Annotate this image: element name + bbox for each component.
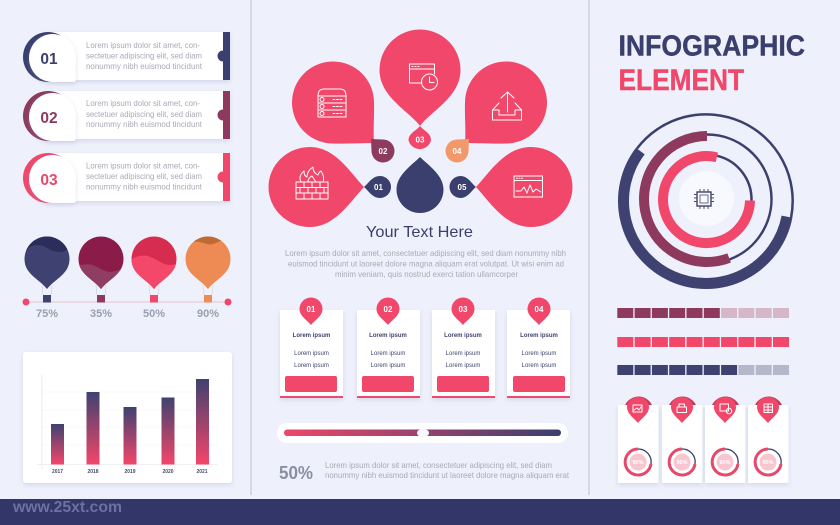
- balloon 50%: 50%: [143, 308, 165, 320]
- panel: bar chart: [23, 352, 232, 483]
- panel: numbered list: [23, 32, 230, 203]
- small card 1: [618, 397, 658, 483]
- petal tag 05: 05: [458, 183, 467, 192]
- bar 2020: 2020: [162, 469, 174, 475]
- small card 2: 90%: [676, 460, 688, 466]
- petal 01: [268, 147, 364, 227]
- balloon 75%: [24, 236, 70, 317]
- list item 01: sectetuer adipiscing elit, sed diam: [86, 50, 202, 60]
- footer band: www.25xt.com: [12, 499, 122, 516]
- icon: server rack: [318, 89, 346, 117]
- middle ring: [644, 134, 771, 262]
- balloon 35%: [77, 236, 125, 320]
- card 04: [507, 298, 570, 398]
- radial chart: [624, 114, 793, 283]
- petal tag 02: 02: [379, 147, 388, 156]
- list item 01: [23, 32, 230, 82]
- text block: center paragraph: [285, 248, 566, 279]
- stat: 50%: 50%: [279, 463, 313, 483]
- text block: stat description: nonummy nibh euismod tincidunt ut laoreet dolore magna aliquam erat: [325, 470, 570, 480]
- petal tag 02: [371, 139, 394, 162]
- card 03: Lorem ipsum: [444, 333, 482, 339]
- card 02: Lorem ipsum: [369, 333, 407, 339]
- bar 2019: 2019: [124, 469, 136, 475]
- small card 3: [705, 397, 746, 483]
- card 03: Lorem ipsum: [446, 363, 480, 369]
- footer band: [0, 499, 840, 525]
- petal tag 04: [446, 139, 469, 162]
- list item 01: Lorem ipsum dolor sit amet, con-: [86, 40, 200, 50]
- card 03: 03: [459, 305, 468, 314]
- central navy drop: [396, 157, 444, 213]
- icon: firewall: [296, 167, 328, 199]
- balloon 90%: 90%: [197, 308, 219, 320]
- card 02: [357, 298, 420, 398]
- list item 02: [23, 91, 230, 141]
- card 03: [432, 298, 495, 398]
- card 04: Lorem ipsum: [522, 363, 556, 369]
- list item 03: Lorem ipsum dolor sit amet, con-: [86, 160, 200, 170]
- outer ring: [624, 114, 793, 283]
- list item 02: sectetuer adipiscing elit, sed diam: [86, 109, 202, 119]
- progress bar: navy 7 of 10: [617, 365, 789, 375]
- card 01: Lorem ipsum: [293, 333, 330, 339]
- list item 01: nonummy nibh euismod tincidunt: [86, 61, 203, 71]
- petal tag 03: [408, 126, 431, 149]
- card 02: Lorem ipsum: [371, 363, 405, 369]
- icon: microchip: [679, 171, 734, 226]
- balloon 50%: [130, 236, 178, 320]
- petal tag 01: 01: [374, 183, 383, 192]
- progress bar: maroon 6 of 10: [617, 308, 789, 318]
- card 02: 02: [384, 305, 393, 314]
- bar 2017: 2017: [52, 469, 63, 475]
- progress bar: red 10 of 10: [617, 337, 789, 347]
- text block: stat description: Lorem ipsum dolor sit amet, consectetuer adipiscing elit, sed diam: [325, 460, 552, 470]
- icon: window with clock: [410, 64, 438, 90]
- petal tag 03: 03: [416, 136, 425, 144]
- small card 1: 90%: [632, 460, 644, 466]
- small card 3: 90%: [719, 460, 731, 466]
- text block: center paragraph: euismod tincidunt ut laoreet dolore magna aliquam erat volutpat. Ut wisi enim ad: [288, 258, 564, 268]
- panel: pricing cards: [280, 298, 570, 398]
- inner ring: [663, 156, 752, 243]
- petal tag 05: [450, 176, 476, 198]
- bar 2019: [124, 407, 136, 475]
- balloon 75%: 75%: [36, 308, 58, 320]
- balloon 90%: [186, 236, 230, 317]
- slider: [277, 423, 568, 443]
- card 01: Lorem ipsum: [294, 363, 329, 369]
- title: INFOGRAPHIC: [618, 30, 805, 62]
- small card 2: [662, 397, 702, 483]
- list item 02: nonummy nibh euismod tincidunt: [86, 119, 203, 129]
- bar 2020: [162, 398, 174, 475]
- list item 03: sectetuer adipiscing elit, sed diam: [86, 171, 202, 181]
- petal 05: [476, 147, 572, 227]
- bar 2018: 2018: [87, 469, 99, 475]
- card 01: 01: [307, 305, 316, 314]
- panel: balloon percentages: [22, 236, 232, 317]
- list item 03: 03: [40, 172, 58, 189]
- bar 2018: [86, 392, 100, 475]
- card 04: Lorem ipsum: [520, 333, 558, 339]
- small card 4: 90%: [762, 460, 774, 466]
- card 03: Lorem ipsum: [446, 351, 480, 357]
- list item 03: [23, 153, 230, 203]
- petal tag 04: 04: [453, 147, 462, 156]
- card 01: Lorem ipsum: [294, 351, 329, 357]
- text block: center paragraph: Lorem ipsum dolor sit amet, consectetuer adipiscing elit, sed diam nonummy nibh: [285, 248, 566, 258]
- petal tag 01: [364, 176, 391, 198]
- icon: upload tray: [492, 92, 522, 120]
- title: [618, 30, 805, 97]
- bar 2017: [51, 424, 64, 475]
- list item 02: Lorem ipsum dolor sit amet, con-: [86, 98, 200, 108]
- panel: small progress cards: [618, 397, 788, 483]
- text block: center paragraph: minim veniam, quis nostrud exerci tation ullamcorper: [335, 269, 518, 279]
- balloon 35%: 35%: [90, 308, 112, 320]
- list item 01: 01: [40, 51, 58, 68]
- petal 03: [380, 30, 460, 126]
- petal 02: [292, 62, 374, 144]
- card 04: 04: [535, 305, 544, 314]
- small card 4: [748, 397, 788, 483]
- bar 2021: 2021: [196, 469, 208, 475]
- list item 03: nonummy nibh euismod tincidunt: [86, 182, 203, 192]
- title: ELEMENT: [618, 64, 744, 97]
- list item 02: 02: [40, 110, 58, 127]
- card 04: Lorem ipsum: [522, 351, 556, 357]
- card 02: Lorem ipsum: [371, 351, 405, 357]
- text block: stat description: [325, 460, 570, 480]
- petal 04: [465, 62, 547, 144]
- icon: activity window: [514, 176, 542, 197]
- bar 2021: [196, 379, 209, 475]
- heading: your text here: Your Text Here: [366, 224, 473, 241]
- panel: petal diagram: [268, 30, 572, 227]
- card 01: [280, 298, 343, 398]
